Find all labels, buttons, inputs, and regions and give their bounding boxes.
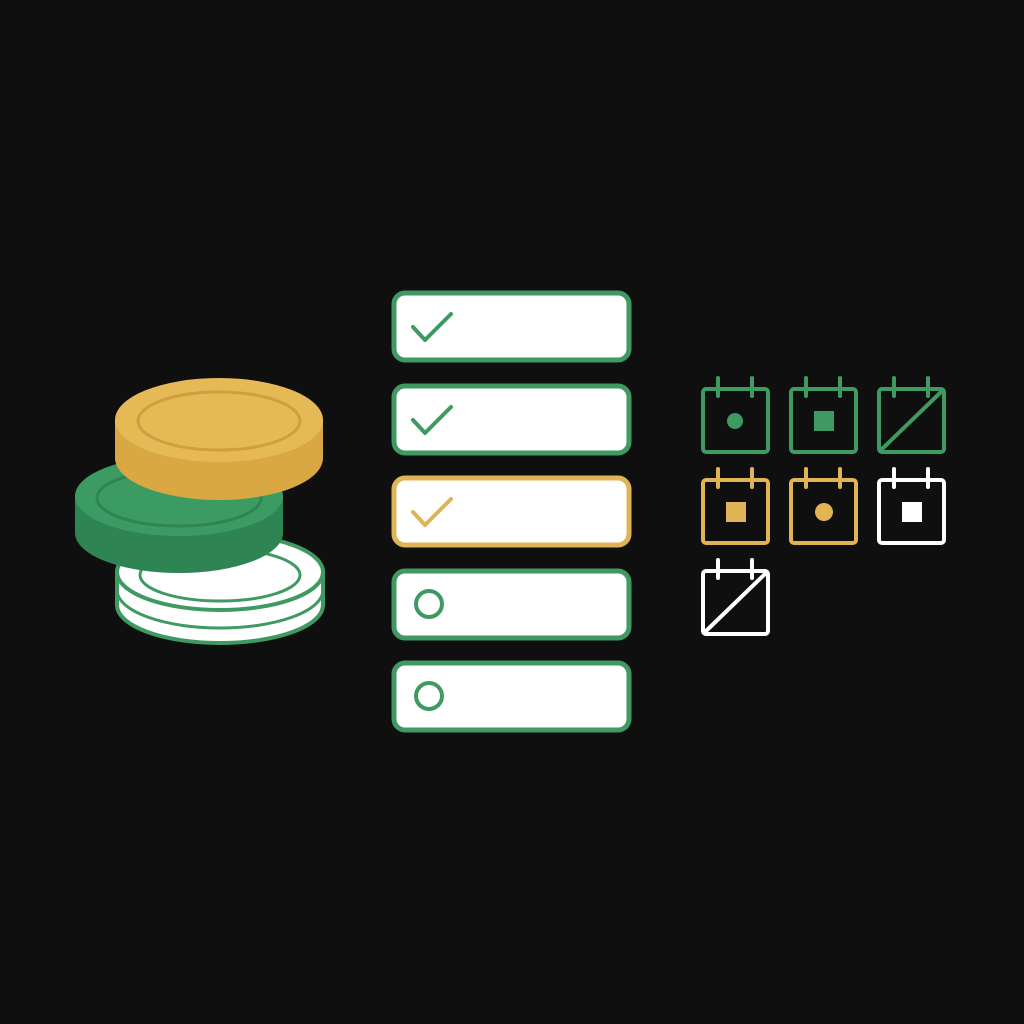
item 5: open circle bbox=[394, 663, 629, 730]
calendar gold dot bbox=[791, 469, 856, 543]
item 1: checked green bbox=[394, 293, 629, 360]
item 2: checked green bbox=[394, 386, 629, 453]
calendar gold square bbox=[703, 469, 768, 543]
calendar icons grid bbox=[703, 378, 944, 634]
coin: gold bbox=[115, 378, 323, 500]
calendar white square bbox=[879, 469, 944, 543]
calendar green square bbox=[791, 378, 856, 452]
coin: green bbox=[75, 456, 283, 573]
calendar white slash bbox=[703, 560, 768, 634]
coin: white bbox=[117, 534, 323, 643]
coin stack bbox=[75, 378, 323, 643]
calendar green dot bbox=[703, 378, 768, 452]
item 3: checked gold bbox=[394, 478, 629, 545]
item 4: open circle bbox=[394, 571, 629, 638]
calendar green slash bbox=[879, 378, 944, 452]
checklist bbox=[394, 293, 629, 730]
